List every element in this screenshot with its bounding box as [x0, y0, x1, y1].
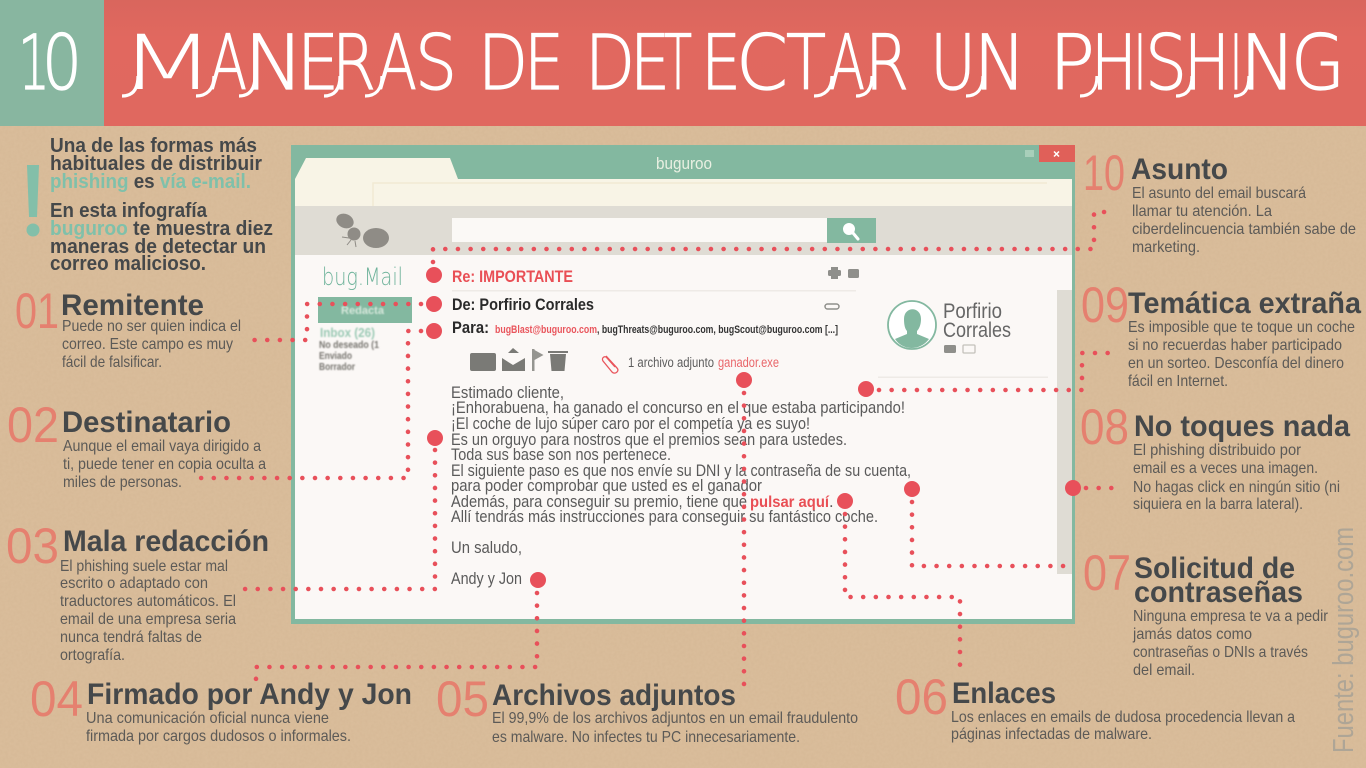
panel: 02 destinatario: miles de personas. — [63, 474, 182, 491]
panel: 05 archivos adjuntos: Archivos adjuntos — [492, 679, 736, 712]
attachment — [628, 355, 779, 370]
panel: 03 mala redaccion: nunca tendrá faltas de — [60, 629, 202, 646]
panel: 09 tematica extraña: fácil en Internet. — [1128, 373, 1228, 390]
panel: 01 remitente — [15, 283, 241, 371]
panel: 06 enlaces: Enlaces — [952, 677, 1056, 710]
window title: buguroo — [656, 154, 712, 173]
title: A — [377, 18, 417, 107]
mail logo: bug.Mail — [322, 263, 403, 291]
folder tabs — [295, 158, 1072, 206]
title: I — [1134, 18, 1146, 107]
recipients — [452, 318, 838, 337]
email body: Allí tendrás más instrucciones para conseguir su fantástico coche. — [451, 508, 878, 526]
title: S — [415, 18, 457, 107]
title: H — [1184, 18, 1230, 107]
intro text: habituales de distribuir — [50, 153, 262, 175]
email body: Es un orguyo para nostros que el premios sean para ustedes. — [451, 431, 847, 449]
title: G — [1291, 18, 1345, 107]
panel: 03 mala redaccion: El phishing suele estar mal — [60, 558, 228, 575]
sidebar — [318, 263, 412, 373]
intro text: correo malicioso. — [50, 253, 206, 275]
recipients: Para: — [452, 318, 489, 337]
panel: 08 no toques nada — [1080, 399, 1350, 513]
title: H — [1091, 18, 1137, 107]
panel: 03 mala redaccion: ortografía. — [60, 647, 125, 664]
email body: Un saludo, — [451, 539, 522, 557]
window controls — [1025, 145, 1075, 162]
email header — [452, 267, 859, 373]
title: T — [664, 18, 692, 107]
icon: message actions — [470, 348, 568, 371]
sender: De: Porfirio Corrales — [452, 295, 594, 314]
panel: 10 asunto — [1083, 145, 1356, 256]
title flourishes — [122, 76, 1249, 96]
panel: 07 solicitud de contraseñas: contraseñas o DNIs a través — [1133, 644, 1308, 661]
panel: 05 archivos adjuntos: es malware. No infectes tu PC innecesariamente. — [492, 729, 800, 746]
panel: 08 no toques nada: siquiera en la barra lateral). — [1133, 496, 1303, 513]
title: E — [297, 18, 339, 107]
panel: 04 firmado: 04 — [30, 671, 83, 727]
title: E — [524, 18, 564, 107]
sender profile: Corrales — [943, 319, 1011, 342]
folder list: Enviado — [319, 350, 352, 362]
callout connectors — [195, 212, 1112, 695]
source credit: Fuente: buguroo.com — [1328, 527, 1360, 753]
panel: 04 firmado: Una comunicación oficial nunca viene — [86, 710, 329, 727]
panel: 02 destinatario: Aunque el email vaya dirigido a — [63, 438, 261, 455]
icon: avatar — [888, 301, 936, 349]
icon: clip — [825, 304, 839, 309]
panel: 08 no toques nada: 08 — [1080, 399, 1129, 455]
panel: 07 solicitud de contraseñas: del email. — [1133, 662, 1195, 679]
panel: 08 no toques nada: El phishing distribuido por — [1133, 442, 1302, 459]
panel: 01 remitente: fácil de falsificar. — [62, 354, 162, 371]
panel: 03 mala redaccion: 03 — [6, 518, 59, 574]
email body — [451, 384, 911, 588]
panel: 04 firmado: Firmado por Andy y Jon — [87, 678, 412, 711]
panel: 08 no toques nada: email es a veces una imagen. — [1133, 460, 1318, 477]
scrollbar — [1057, 290, 1072, 574]
icon: search — [844, 224, 858, 239]
panel: 01 remitente: correo. Este campo es muy — [62, 336, 233, 353]
title: M — [119, 18, 216, 107]
panel: 10 asunto: 10 — [1083, 145, 1125, 201]
intro text — [26, 135, 273, 275]
title: N — [244, 18, 304, 107]
subject: Re: IMPORTANTE — [452, 267, 573, 286]
icon: exclamation mark — [26, 165, 40, 236]
title: R — [332, 18, 376, 107]
title: E — [630, 18, 670, 107]
panel: 09 tematica extraña: si no recuerdas haber participado — [1128, 337, 1342, 354]
title: E — [701, 18, 741, 107]
panel: 09 tematica extraña: en un sorteo. Desconfía del dinero — [1128, 355, 1344, 372]
email body: pulsar aquí — [750, 494, 830, 511]
panel: 01 remitente: Remitente — [61, 289, 204, 322]
panel: 03 mala redaccion — [6, 518, 269, 664]
attachment: ganador.exe — [718, 355, 779, 370]
panel: 07 solicitud de contraseñas: Ninguna empresa te va a pedir — [1133, 608, 1329, 625]
panel: 06 enlaces: Los enlaces en emails de dudosa procedencia llevan a — [951, 709, 1295, 726]
panel: 03 mala redaccion: Mala redacción — [63, 525, 269, 558]
panel: 05 archivos adjuntos — [436, 671, 858, 746]
icon: paperclip — [602, 356, 618, 373]
intro text: phishing es vía e-mail. — [50, 171, 251, 193]
panel: 06 enlaces: 06 — [895, 669, 948, 725]
email body: Además, para conseguir su premio, tiene que — [451, 493, 747, 511]
email body: El siguiente paso es que nos envíe su DNI y la contraseña de su cuenta, — [451, 462, 911, 480]
email body: Andy y Jon — [451, 570, 522, 588]
title: A — [829, 18, 865, 107]
panel: 01 remitente: Puede no ser quien indica el — [62, 318, 241, 335]
panel: 01 remitente: 01 — [15, 283, 59, 339]
icon: bug logo — [334, 211, 389, 248]
panel: 09 tematica extraña: 09 — [1081, 277, 1129, 333]
panel: 03 mala redaccion: email de una empresa seria — [60, 611, 236, 628]
title: A — [209, 18, 247, 107]
panel: 06 enlaces — [895, 669, 1295, 743]
title: P — [1049, 18, 1095, 107]
panel: 09 tematica extraña: Temática extraña — [1128, 287, 1361, 320]
title: N — [974, 18, 1026, 107]
email body: ¡Enhorabuena, ha ganado el concurso en el que estaba participando! — [451, 399, 905, 417]
folder list: Borrador — [319, 361, 355, 373]
intro text: buguroo te muestra diez — [50, 218, 273, 240]
title: R — [865, 18, 909, 107]
recipients: , bugThreats@buguroo.com, bugScout@buguroo.com [...] — [597, 324, 838, 336]
title: U — [930, 18, 976, 107]
panel: 10 asunto: Asunto — [1131, 153, 1228, 186]
title: T — [786, 18, 826, 107]
contact name: Porfirio — [943, 300, 1002, 323]
panel: email window — [291, 145, 1075, 624]
panel: 10 asunto: llamar tu atención. La — [1132, 203, 1272, 220]
panel: 03 mala redaccion: escrito o adaptado con — [60, 575, 208, 592]
intro text: Una de las formas más — [50, 135, 257, 157]
panel: 07 solicitud de contraseñas: 07 — [1083, 545, 1131, 601]
email body: Toda sus base son nos pertenece. — [451, 446, 671, 464]
intro text: En esta infografía — [50, 200, 208, 222]
panel: 05 archivos adjuntos: 05 — [436, 671, 489, 727]
email body: para poder comprobar que usted es el ganador — [451, 477, 762, 495]
panel: 08 no toques nada: No toques nada — [1134, 410, 1350, 443]
panel: 05 archivos adjuntos: El 99,9% de los archivos adjuntos en un email fraudulento — [492, 710, 858, 727]
panel: 10 asunto: El asunto del email buscará — [1132, 185, 1306, 202]
toolbar — [295, 206, 1072, 255]
panel: 04 firmado — [30, 671, 412, 745]
panel: 04 firmado: firmada por cargos dudosos o informales. — [86, 728, 351, 745]
panel: 06 enlaces: páginas infectadas de malware. — [951, 726, 1152, 743]
panel: 08 no toques nada: No hagas click en ningún sitio (ni — [1133, 479, 1340, 496]
folder list: No deseado (1 — [319, 339, 379, 351]
panel: 02 destinatario: ti, puede tener en copia oculta a — [63, 456, 266, 473]
title: D — [585, 18, 635, 107]
panel: 07 solicitud de contraseñas: Solicitud de — [1134, 552, 1295, 585]
sender profile — [878, 300, 1048, 378]
recipients: bugBlast@buguroo.com — [495, 324, 597, 336]
email body: ¡El coche de lujo súper caro por el competía ya es suyo! — [451, 415, 810, 433]
title: S — [1145, 18, 1187, 107]
panel: 07 solicitud de contraseñas: jamás datos como — [1132, 626, 1252, 643]
content area — [295, 255, 1072, 619]
panel: 07 solicitud de contraseñas: contraseñas — [1134, 576, 1303, 609]
panel: 09 tematica extraña — [1081, 277, 1361, 390]
intro text: maneras de detectar un — [50, 236, 266, 258]
email body: . — [829, 493, 834, 511]
title: C — [736, 18, 788, 107]
attachment: 1 archivo adjunto — [628, 355, 714, 370]
title: I — [1230, 18, 1242, 107]
panel: 02 destinatario: Destinatario — [62, 406, 231, 439]
panel: 02 destinatario: 02 — [7, 397, 59, 453]
panel: 03 mala redaccion: traductores automáticos. El — [60, 593, 236, 610]
icon: print and save — [828, 267, 859, 279]
title number: 1 — [18, 18, 50, 107]
panel: 07 solicitud de contraseñas — [1083, 545, 1329, 679]
compose button: Redacta — [341, 305, 385, 317]
title: D — [478, 18, 528, 107]
title number: 0 — [42, 18, 82, 107]
title: N — [1240, 18, 1296, 107]
panel: 02 destinatario — [7, 397, 266, 491]
icon: contact actions — [944, 345, 975, 353]
header banner — [0, 0, 1366, 126]
folder list — [319, 326, 379, 373]
email body: Estimado cliente, — [451, 384, 564, 402]
folder list: Inbox (26) — [320, 326, 375, 340]
panel: 10 asunto: marketing. — [1132, 239, 1200, 256]
